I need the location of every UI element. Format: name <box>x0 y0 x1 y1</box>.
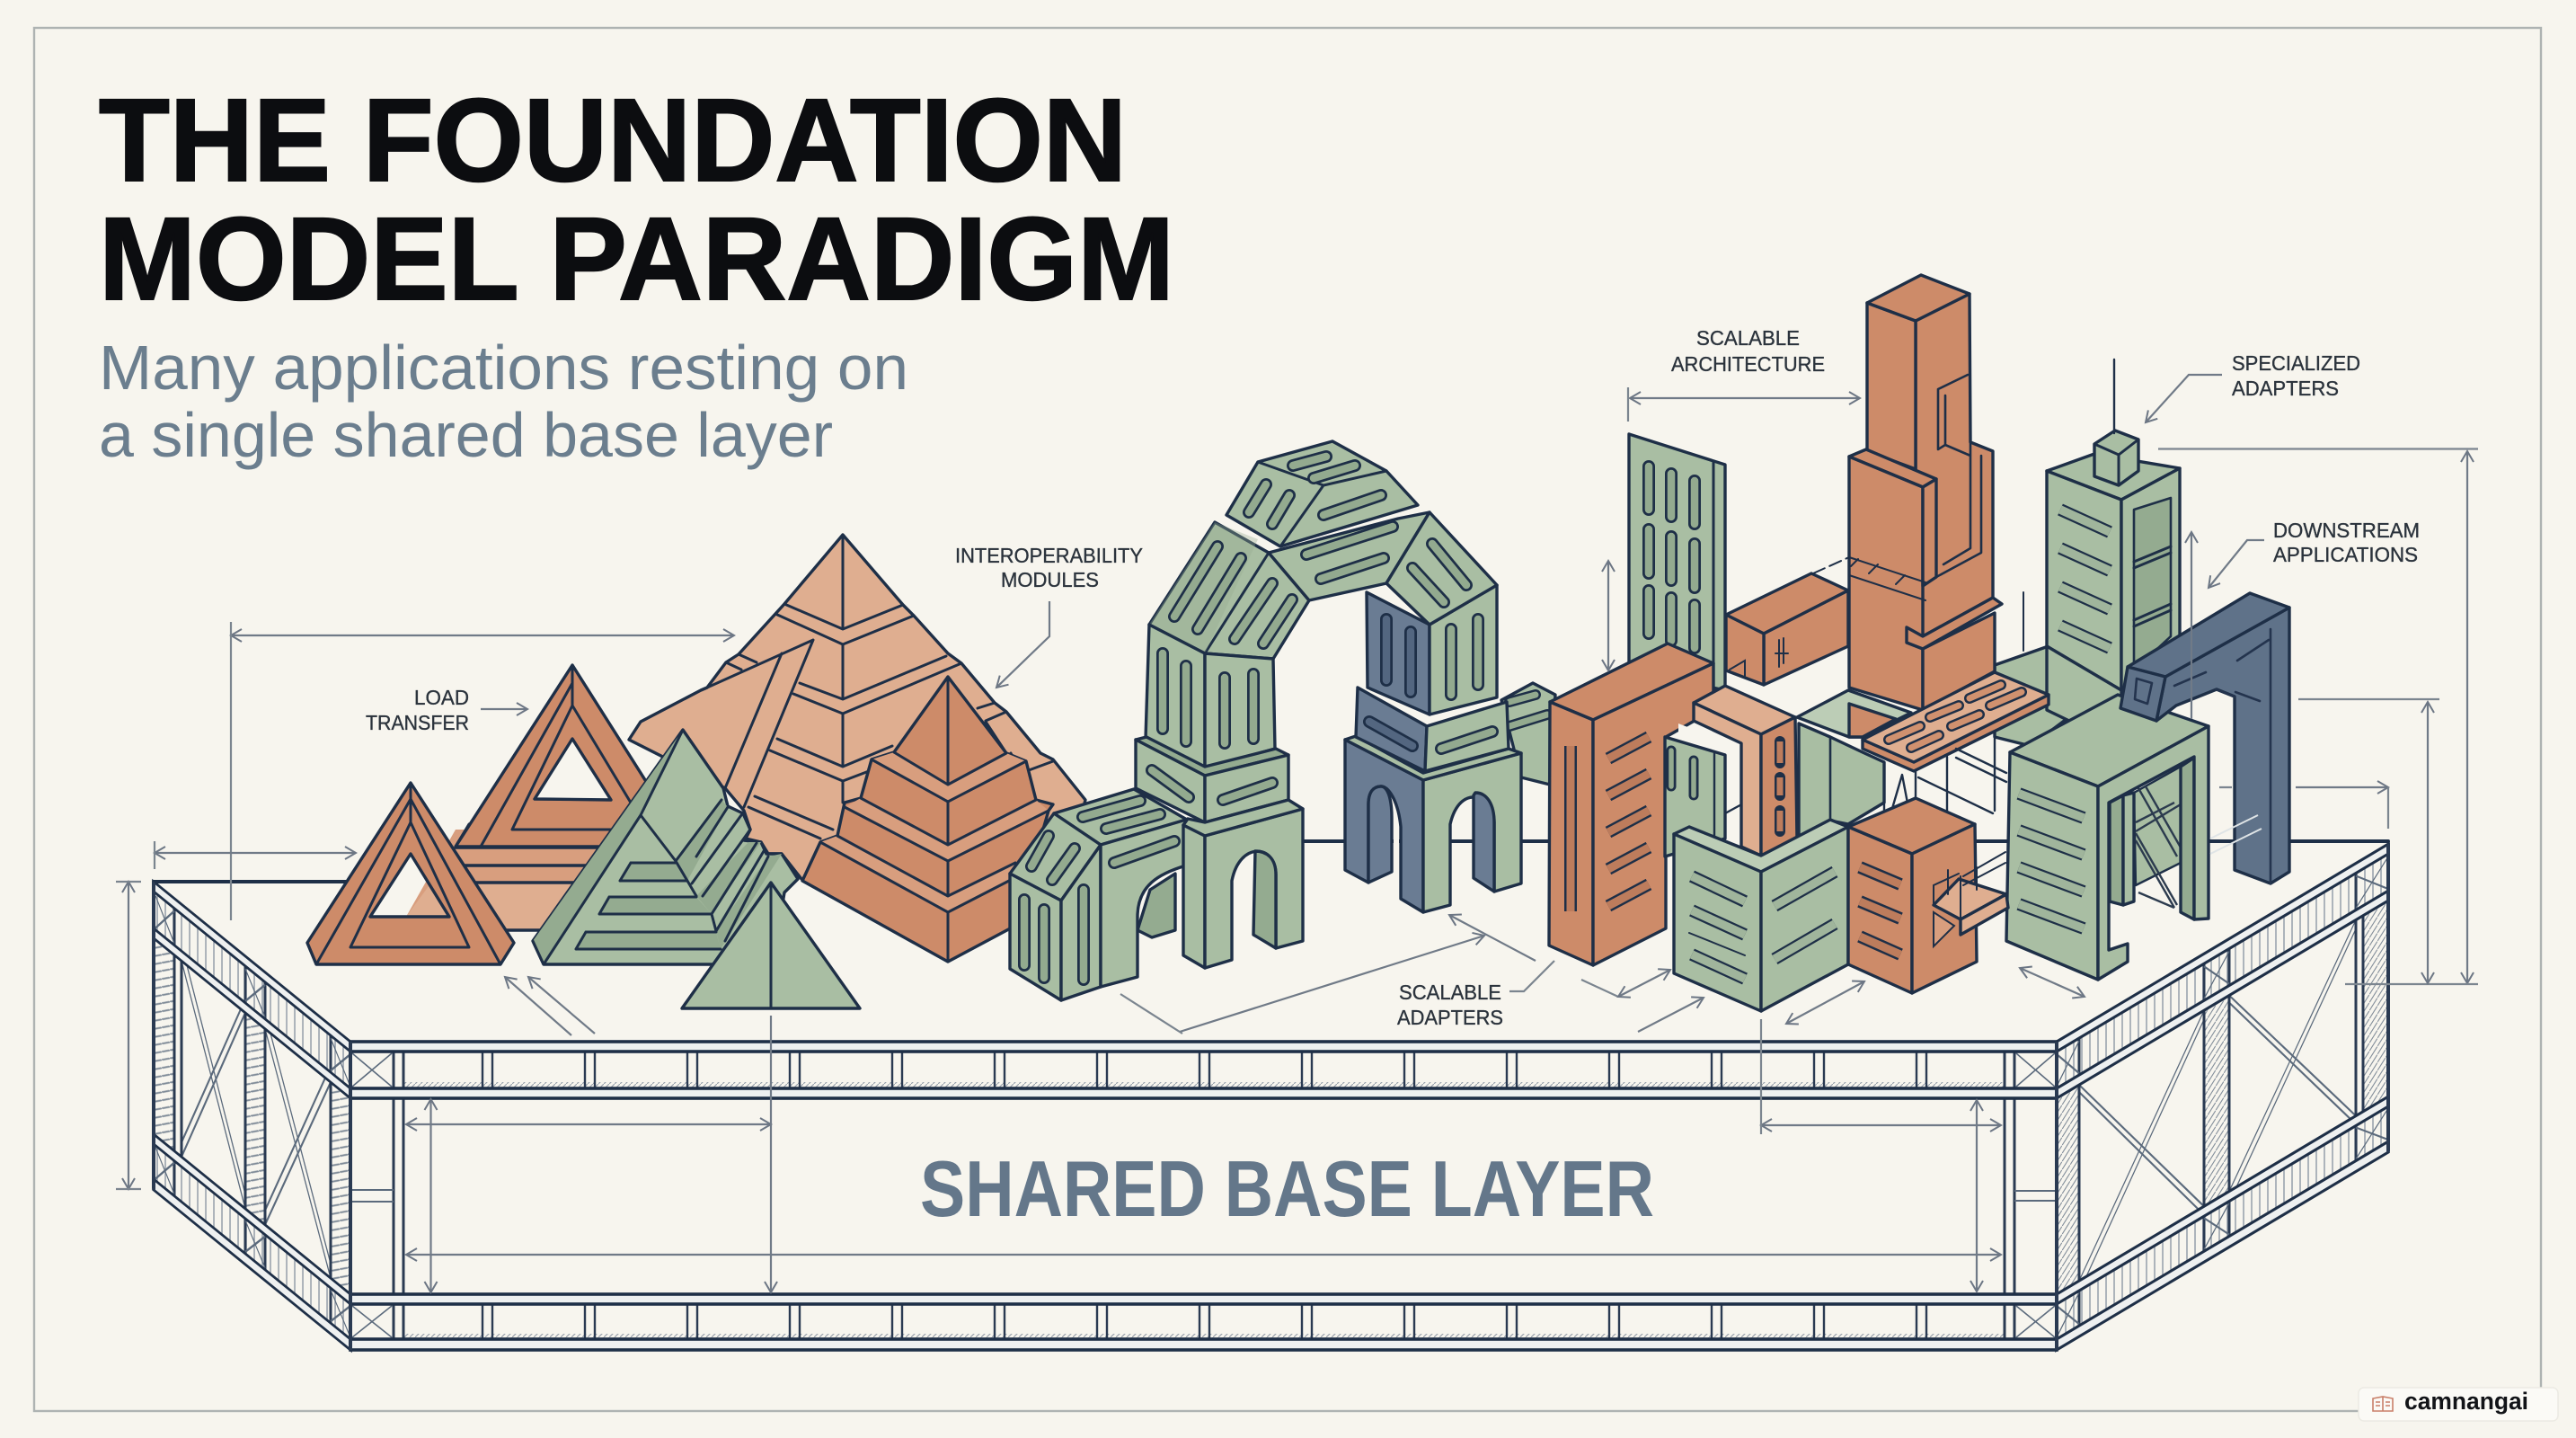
sage tower with window bay <box>2047 431 2180 746</box>
sage panel behind open terracotta column <box>1665 723 1748 863</box>
architecture span <box>1630 397 1860 399</box>
label: interoperability modules: MODULES <box>1001 568 1099 591</box>
label: scalable adapters <box>1397 981 1503 1029</box>
label: downstream applications: DOWNSTREAM <box>2273 519 2420 542</box>
city cluster: downstream applications <box>1549 275 2289 1011</box>
arch crown segments <box>1149 441 1497 659</box>
upper left span <box>231 635 734 636</box>
leader: downstream applications <box>2209 540 2264 588</box>
label: downstream applications <box>2273 519 2420 566</box>
leftmost green block <box>1010 789 1187 1000</box>
front truss panel <box>350 1042 2057 1350</box>
back edges of platform <box>154 841 2388 882</box>
green stepped pyramid <box>533 730 798 964</box>
front terracotta block <box>1848 798 2008 993</box>
slate pier <box>1345 736 1521 912</box>
label: specialized adapters: ADAPTERS <box>2232 377 2339 400</box>
label: specialized adapters <box>2232 351 2360 400</box>
title <box>99 74 1174 324</box>
tall sage panel <box>1629 434 1725 692</box>
label: load transfer <box>366 686 469 734</box>
label: interoperability modules: INTEROPERABILITY <box>955 544 1143 567</box>
subtitle: Many applications resting on <box>99 333 908 403</box>
subtitle: a single shared base layer <box>99 400 833 470</box>
label: scalable architecture: ARCHITECTURE <box>1671 352 1825 376</box>
front panel inner span long <box>406 1254 2001 1256</box>
central drop arrow <box>770 1016 772 1292</box>
label: scalable architecture: SCALABLE <box>1696 326 1800 350</box>
antenna <box>2113 360 2115 433</box>
right overall height <box>2466 451 2468 983</box>
label: scalable adapters: ADAPTERS <box>1397 1006 1503 1029</box>
pyramid cluster: triangular applications <box>307 535 1085 1008</box>
front panel inner height <box>429 1099 432 1292</box>
small block behind the arch <box>1501 683 1555 785</box>
shared base layer label: SHARED BASE LAYER <box>920 1144 1654 1233</box>
leader: load transfer <box>481 708 527 710</box>
central pale sage volume <box>1797 690 1911 838</box>
label: load transfer: LOAD <box>414 686 469 709</box>
icon: open book <box>2373 1397 2393 1411</box>
right inner height <box>1976 1100 1978 1292</box>
leader: specialized adapters <box>2146 375 2222 422</box>
left arch column <box>1136 625 1288 822</box>
label: specialized adapters: SPECIALIZED <box>2232 351 2360 375</box>
subtitle <box>99 333 908 470</box>
green front triangle <box>682 883 860 1008</box>
right top span <box>2296 786 2388 788</box>
title: THE FOUNDATION <box>99 74 1127 206</box>
main tall terracotta tower <box>1813 275 2002 710</box>
triangle frame back <box>456 665 692 854</box>
open terracotta column <box>1694 686 1797 856</box>
left platform height <box>128 882 129 1189</box>
label: load transfer: TRANSFER <box>366 711 469 734</box>
pyramid small arrows <box>505 977 571 1035</box>
arch cluster: interoperability modules <box>1010 441 1555 1000</box>
terracotta block with slots <box>1549 644 1713 965</box>
leader: scalable adapters <box>1509 961 1554 991</box>
label: interoperability modules <box>955 544 1143 591</box>
large light stepped pyramid <box>629 535 1085 899</box>
horizontal terracotta beam <box>1726 573 1848 685</box>
label: scalable adapters: SCALABLE <box>1399 981 1501 1004</box>
leader: interoperability <box>996 601 1049 688</box>
lower left span <box>155 852 356 854</box>
truss ties under plate <box>1884 734 2006 836</box>
front panel inner span short <box>406 1123 771 1125</box>
tower height <box>2191 532 2192 719</box>
shared base platform <box>154 841 2388 1350</box>
back sage block <box>1995 592 2082 746</box>
front sage portal frame <box>2006 695 2209 980</box>
slate and sage upper column <box>1356 585 1509 771</box>
left side truss panel <box>154 882 350 1350</box>
right secondary height <box>2427 702 2429 983</box>
title: MODEL PARADIGM <box>99 192 1174 324</box>
perforated terracotta plate <box>1863 672 2049 771</box>
label: scalable architecture <box>1671 326 1825 376</box>
badge text: camnangai <box>2404 1388 2528 1415</box>
slate gantry arch <box>2120 593 2289 883</box>
dimension lines and arrows <box>116 360 2478 1292</box>
right inner span <box>1761 1124 2001 1126</box>
front corner sage block <box>1674 820 1848 1011</box>
stepped terracotta pyramid <box>802 677 1053 962</box>
label: downstream applications: APPLICATIONS <box>2273 543 2418 566</box>
watermark badge <box>2359 1388 2558 1421</box>
stepped slab behind triangles <box>406 830 647 930</box>
green arch pier <box>1183 800 1303 968</box>
triangle frame front <box>307 783 514 964</box>
lower diagonal dimension arrows <box>1449 915 1536 961</box>
right side truss panel <box>2057 844 2388 1350</box>
panel height <box>1607 561 1609 670</box>
